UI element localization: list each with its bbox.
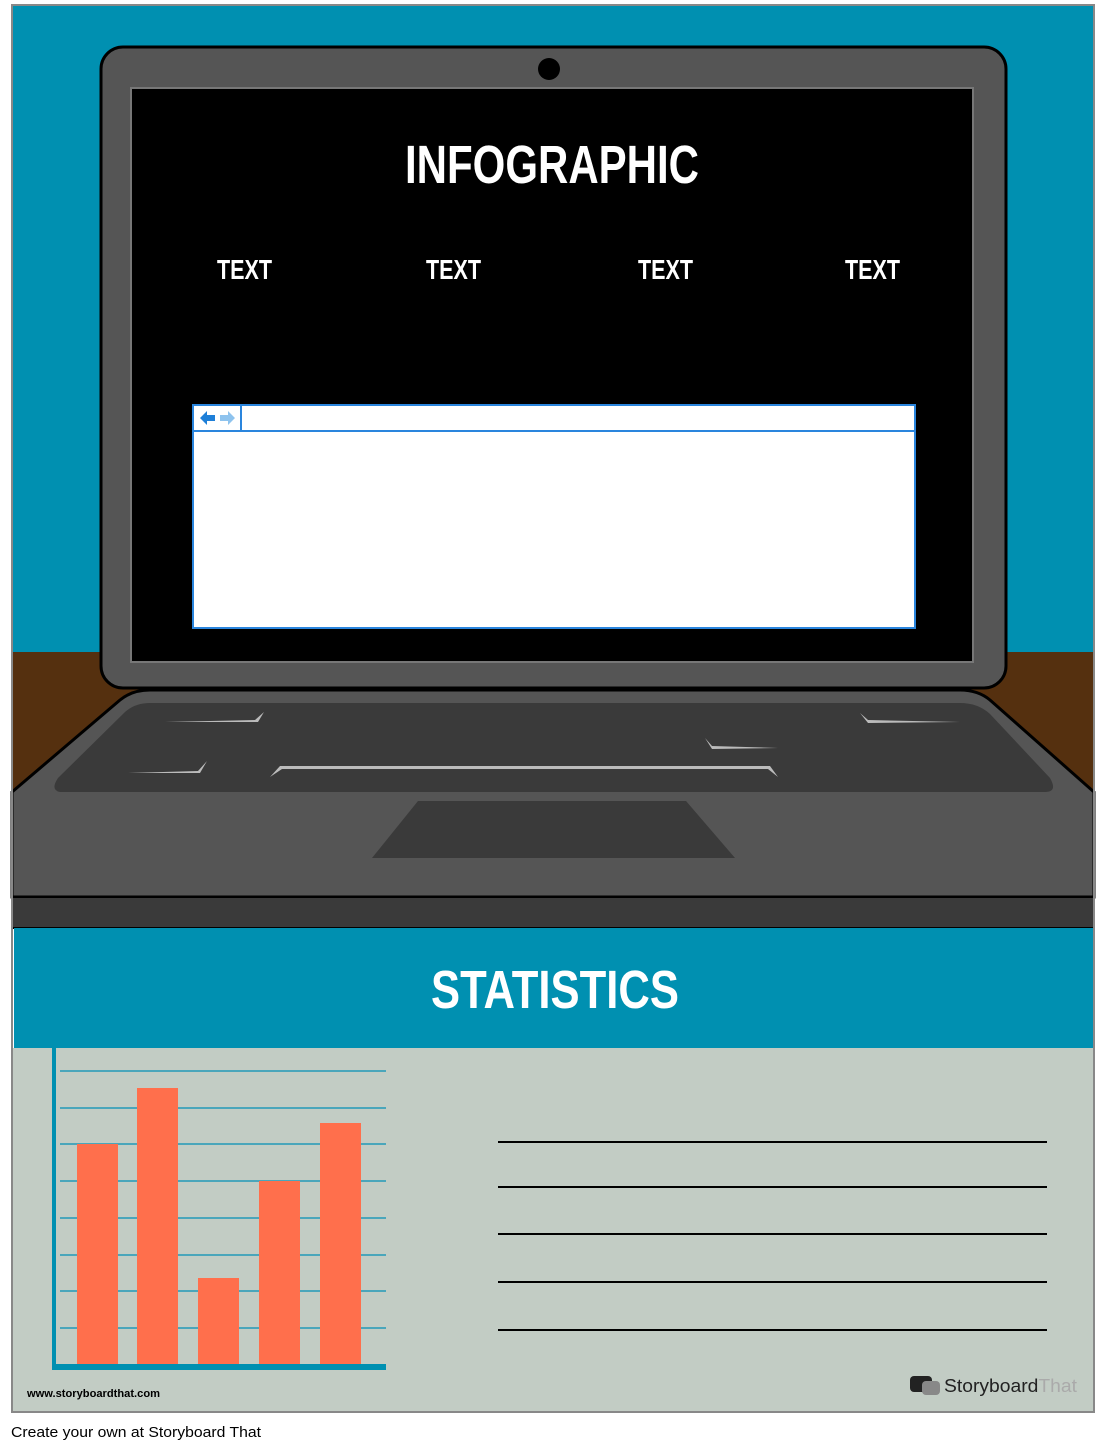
text labels: TEXT [426,254,481,285]
writing lines [498,1142,1047,1330]
text labels: TEXT [638,254,693,285]
logo: Storyboard That [944,1376,1077,1396]
screen [131,88,973,662]
background wall [12,5,1094,653]
website url: www.storyboardthat.com [26,1388,160,1400]
browser window [193,405,915,628]
statistics panel [12,1048,1094,1412]
icon: webcam [538,58,560,80]
title: INFOGRAPHIC [405,135,699,195]
icon: arrows [200,411,215,425]
desk [12,652,1094,902]
trackpad [372,801,735,858]
key highlights [128,712,960,777]
text labels: TEXT [845,254,900,285]
footer text: Create your own at Storyboard That [11,1424,262,1441]
laptop bottom band [12,897,1094,928]
text labels: TEXT [217,254,272,285]
laptop base [12,690,1094,897]
text labels [217,254,900,285]
bar chart [52,1048,386,1370]
statistics heading: STATISTICS [431,960,679,1020]
statistics banner [14,928,1094,1048]
laptop screen bezel [101,47,1006,688]
keyboard area [54,703,1053,792]
